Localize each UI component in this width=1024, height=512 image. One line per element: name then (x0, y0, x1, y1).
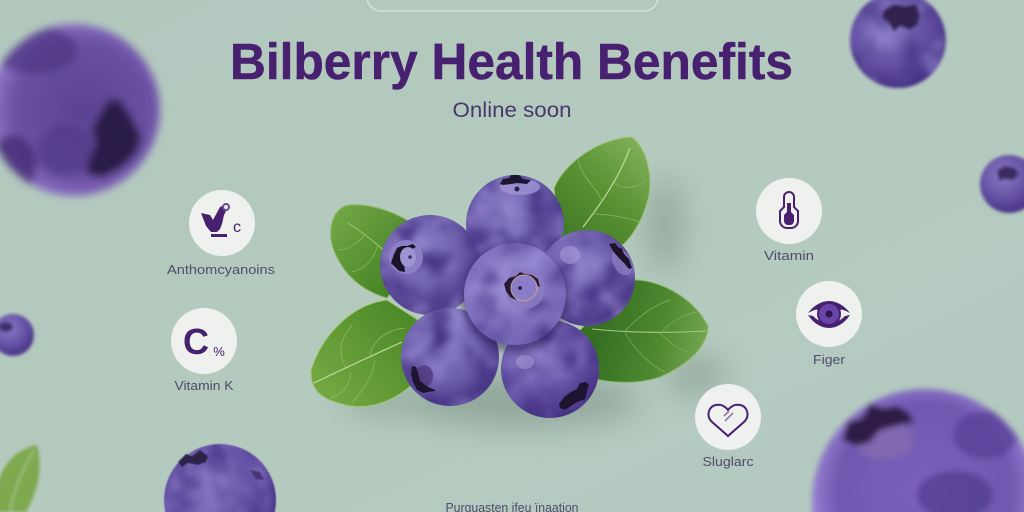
blurred berry: right edge (980, 155, 1024, 213)
icon: C percent (171, 308, 237, 374)
icon: thermometer (756, 178, 822, 244)
benefit: vitamin K (171, 308, 237, 393)
leaf: lower right (580, 280, 708, 382)
icon: eye (796, 281, 862, 347)
label: fiber: Figer (813, 352, 846, 367)
blurred berry: top left (0, 24, 160, 196)
blurred berry: top right (850, 0, 946, 88)
icon: mortar and C: c (233, 219, 241, 236)
leaf: left (331, 205, 410, 298)
benefit: heart (695, 384, 761, 469)
icon: C percent: % (213, 344, 225, 359)
label: anthocyanins: Anthomcyanoins (167, 262, 276, 277)
blurred berry: bottom right (812, 389, 1024, 512)
leaf: upper right (554, 137, 650, 245)
subtitle: Online soon (452, 99, 572, 122)
berry: right (539, 230, 636, 326)
title: Bilberry Health Benefits (230, 33, 793, 90)
icon: heart (695, 384, 761, 450)
contact shadow under center berry (461, 244, 569, 352)
benefit: vitamin (756, 178, 822, 263)
cluster shadow (340, 177, 723, 426)
blurred leaf: bottom left (0, 445, 40, 512)
label: vitamin K: Vitamin K (174, 378, 234, 393)
berry: bottom left (401, 308, 499, 406)
benefit: fiber (796, 281, 862, 367)
benefit: anthocyanins (167, 190, 276, 277)
berry: top (466, 175, 564, 273)
icon: C percent: C (183, 321, 209, 362)
leaf: lower left (311, 300, 420, 407)
label: heart: Sluglarc (702, 454, 754, 469)
label: vitamin: Vitamin (764, 248, 814, 263)
blurred berry: bottom left (164, 444, 276, 512)
berry: bottom right (501, 320, 599, 418)
berry cluster with leaves (311, 137, 723, 426)
top outlined pill (367, 0, 658, 11)
blurred berry: left edge (0, 314, 34, 356)
berry: center (464, 243, 566, 345)
berry: left (380, 215, 480, 315)
